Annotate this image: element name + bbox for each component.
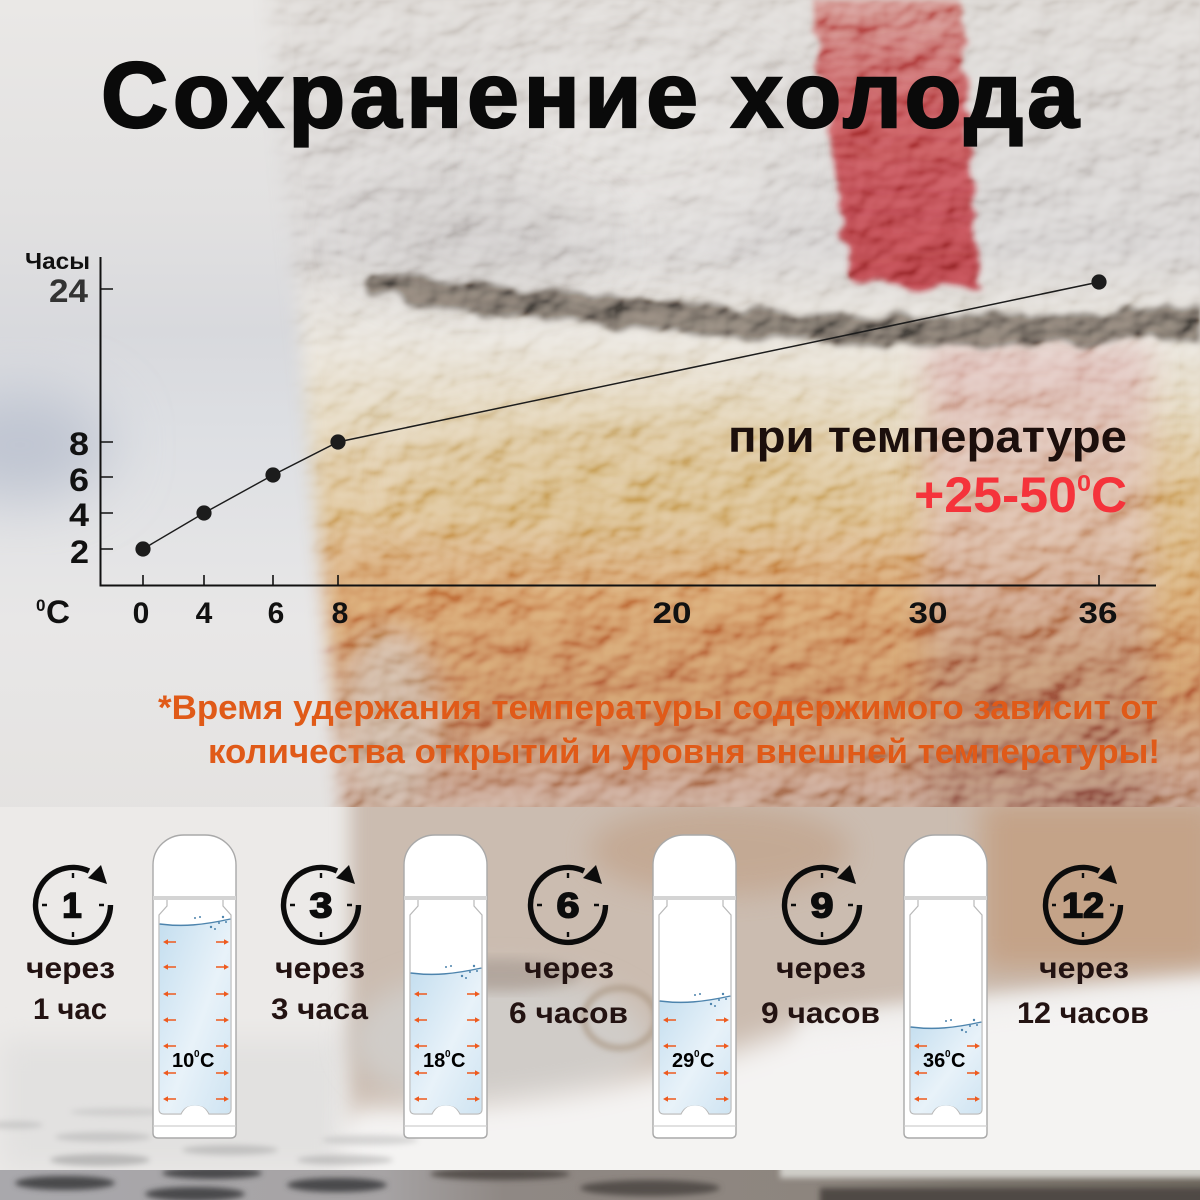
line chart: hours vs temperature: [25, 248, 1156, 630]
thermos 1: 10 degrees: [153, 835, 236, 1138]
timeline: 3 hours clock: [284, 865, 358, 942]
title: [101, 43, 1080, 147]
label: after 12 hours: через: [1039, 952, 1129, 985]
label: after 6 hours: через: [524, 952, 614, 985]
label: after 3 hours: 3 часа: [271, 993, 368, 1026]
thermos 1: 10 degrees: 10: [172, 1050, 194, 1072]
label: after 1 hour: 1 час: [33, 993, 107, 1026]
thermos 2: 18 degrees: 18: [423, 1050, 445, 1072]
thermos 4: 36 degrees: C: [951, 1050, 965, 1072]
y axis label: Часы: [25, 248, 90, 274]
lower translucent panel: [0, 807, 1200, 1170]
temperature range: C: [1091, 467, 1127, 523]
y axis values: [49, 273, 89, 570]
x axis values: 30: [908, 597, 948, 630]
background photo: condensation on a glass: [0, 0, 1200, 835]
y axis values: 2: [70, 534, 89, 570]
title: Сохранение: [101, 43, 698, 147]
label: after 12 hours: 12 часов: [1017, 997, 1149, 1030]
thermos 2: 18 degrees: [404, 835, 487, 1138]
footnote: [158, 689, 1160, 771]
label: after 3 hours: через: [275, 952, 365, 985]
axis ticks: [100, 289, 1099, 585]
thermos 4: 36 degrees: 0: [945, 1049, 951, 1060]
title: холода: [731, 43, 1080, 147]
timeline: 1 hour clock: [36, 865, 110, 942]
timeline: 6 hours clock: [531, 865, 606, 942]
temperature condition text: при температуре: [728, 411, 1127, 462]
timeline: 6 hours clock: 6: [556, 886, 580, 926]
label: after 1 hour: через: [26, 952, 115, 985]
x axis values: 8: [332, 597, 348, 630]
label: after 3 hours: [271, 952, 368, 1026]
thermos 4: 36 degrees: 36: [923, 1050, 945, 1072]
data points: [135, 274, 1107, 557]
label: after 6 hours: 6 часов: [509, 997, 628, 1030]
y axis values: 6: [69, 462, 89, 498]
label: after 6 hours: [509, 952, 628, 1030]
timeline: 12 hours clock: 12: [1062, 886, 1104, 926]
thermos 1: 10 degrees: C: [200, 1050, 214, 1072]
x axis values: 4: [196, 597, 213, 630]
thermos 2: 18 degrees: 0: [445, 1049, 451, 1060]
x axis values: [133, 597, 1118, 630]
temperature range: 0: [1077, 470, 1091, 496]
thermos 1: 10 degrees: 0: [194, 1049, 200, 1060]
label: after 12 hours: [1017, 952, 1149, 1030]
x axis values: 36: [1078, 597, 1118, 630]
data line: [143, 282, 1099, 549]
timeline: 9 hours clock: [785, 865, 860, 942]
timeline: 9 hours clock: 9: [810, 886, 834, 926]
thermos 3: 29 degrees: C: [700, 1050, 714, 1072]
x axis unit: C: [46, 594, 70, 630]
footnote: *Время удержания температуры содержимого зависит от: [158, 689, 1158, 727]
thermos 3: 29 degrees: [653, 835, 736, 1138]
x axis values: 20: [652, 597, 692, 630]
temperature range: +25-50: [914, 467, 1077, 523]
timeline: 1 hour clock: 1: [62, 886, 82, 926]
x axis unit: [36, 594, 70, 630]
label: after 9 hours: через: [776, 952, 866, 985]
thermos 4: 36 degrees: [904, 835, 987, 1138]
thermos 3: 29 degrees: 0: [694, 1049, 700, 1060]
label: after 1 hour: [26, 952, 115, 1026]
x axis values: 6: [268, 597, 284, 630]
bottom dark strip with perforated surface: [0, 1170, 1200, 1200]
label: after 9 hours: [761, 952, 880, 1030]
x axis unit: 0: [36, 596, 45, 615]
label: after 9 hours: 9 часов: [761, 997, 880, 1030]
timeline: 12 hours clock: [1046, 865, 1120, 942]
x axis values: 0: [133, 597, 149, 630]
axes: [100, 257, 1156, 586]
footnote: количества открытий и уровня внешней температуры!: [208, 733, 1160, 771]
timeline: 3 hours clock: 3: [310, 886, 332, 926]
y axis values: 24: [49, 273, 88, 309]
thermos 2: 18 degrees: C: [451, 1050, 465, 1072]
y axis values: 8: [69, 426, 89, 462]
y axis values: 4: [69, 497, 89, 533]
thermos 3: 29 degrees: 29: [672, 1050, 694, 1072]
